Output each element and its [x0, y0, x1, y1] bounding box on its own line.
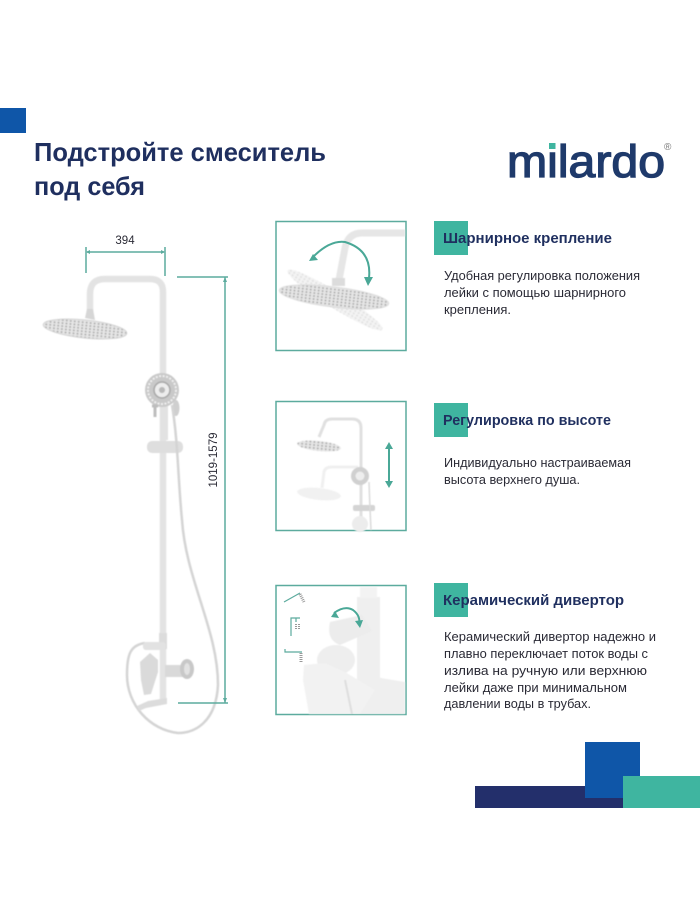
- description: Индивидуально настраиваемая: [444, 455, 631, 470]
- decorative colour blocks bottom right: [475, 742, 700, 808]
- description: [444, 268, 640, 317]
- decorative blue square top left: [0, 108, 26, 133]
- teal heading square: [434, 403, 468, 437]
- logo: milardo: milardo: [507, 136, 665, 187]
- slider bracket: [147, 441, 183, 453]
- description: высота верхнего душа.: [444, 472, 580, 487]
- heading: Керамический дивертор: [443, 593, 624, 609]
- hand shower: [351, 467, 375, 532]
- faded head positions: [283, 264, 387, 336]
- icon: curved double arrow: [331, 608, 363, 628]
- hose: [127, 405, 218, 733]
- dimension: width 394: 394: [115, 235, 135, 247]
- icon: vertical double arrow: [385, 442, 393, 488]
- description: Керамический дивертор надежно и: [444, 629, 656, 644]
- description: плавно переключает поток воды с: [444, 646, 648, 661]
- lower faded shower: [322, 467, 358, 488]
- heading: Шарнирное крепление: [443, 231, 612, 247]
- dimension: height 1019-1579: [177, 277, 228, 703]
- lever and body: [317, 645, 355, 675]
- icons: outlets: [284, 593, 304, 662]
- feature: height adjustment: [434, 403, 631, 487]
- description: крепления.: [444, 302, 511, 317]
- heading: Регулировка по высоте: [443, 413, 611, 429]
- title: Подстройте смеситель: [34, 137, 326, 167]
- riser pipe and arm: [90, 279, 163, 700]
- description: лейки даже при минимальном: [444, 680, 627, 695]
- feature: swivel joint: [434, 221, 640, 317]
- diverter knob: [329, 615, 372, 645]
- upper shower: [319, 419, 361, 530]
- title: [34, 137, 326, 201]
- overhead shower head: [42, 309, 128, 342]
- description: [444, 629, 656, 711]
- description: давлении воды в трубах.: [444, 696, 591, 711]
- teal heading square: [434, 221, 468, 255]
- title: под себя: [34, 171, 145, 201]
- logo: milardo: ®: [664, 142, 672, 153]
- dimension: width 394: [86, 235, 165, 276]
- description: Удобная регулировка положения: [444, 268, 640, 283]
- panel: swivel joint image: [276, 222, 406, 350]
- wall arm: [375, 677, 405, 714]
- description: излива на ручную или верхнюю: [444, 663, 647, 678]
- hand shower: [145, 373, 180, 440]
- shower product drawing: [42, 279, 218, 733]
- icon: curved double arrow: [309, 242, 373, 286]
- panel: height adjustment image: [276, 402, 406, 532]
- mixer body: [137, 633, 194, 711]
- description: [444, 455, 631, 487]
- shower head: [278, 280, 390, 314]
- arm: [339, 233, 405, 280]
- dimension: height 1019-1579: 1019-1579: [208, 432, 220, 488]
- feature: ceramic diverter: [434, 583, 656, 711]
- riser: [357, 597, 380, 714]
- description: лейки с помощью шарнирного: [444, 285, 626, 300]
- panel: ceramic diverter image: [276, 586, 406, 714]
- teal heading square: [434, 583, 468, 617]
